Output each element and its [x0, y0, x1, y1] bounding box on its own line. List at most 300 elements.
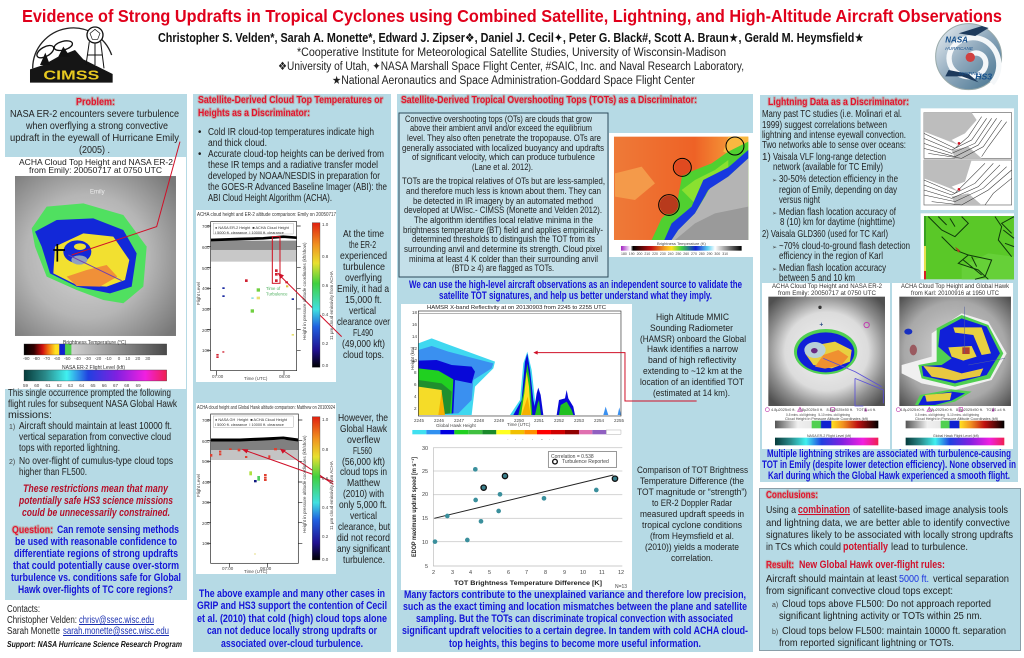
chart: Emily altitude comparison: ● NASA ER-2 Height ■ ACHA Cloud Height: [215, 226, 290, 230]
text block: problem statement: when overflying a strong convective: [25, 121, 168, 132]
text block: bullets: these IR temps and a radiative transfer model: [208, 160, 378, 171]
chart: HAMSR reflectivity: 2254: [594, 418, 605, 423]
text block: flight rules: Aircraft should maintain at least 10000 ft.: [19, 421, 172, 432]
chart: Matthew altitude comparison: 300: [202, 500, 210, 505]
callout: question: [11, 524, 181, 596]
text block: lightning networks: network (available for TC Emily): [773, 162, 883, 173]
text block: Global Hawk over Matthew: only 5,000 ft.: [339, 500, 387, 511]
text block: TOT definition box: of significant velocity, which can produce turbulence: [412, 152, 595, 162]
chart: Emily altitude comparison: Flight Level: [196, 282, 201, 305]
chart: HAMSR reflectivity: 16: [412, 322, 418, 327]
figure: Emily storm with lightning: from Emily: 20050717 at 0750 UTC: [778, 291, 877, 297]
chart: updraft speed scatter: 7: [525, 570, 528, 576]
text block: TOT definition box: The algorithm identifies local relative minima in the: [414, 215, 593, 225]
text block: Global Hawk over Matthew: FL560: [353, 446, 372, 457]
chart: updraft speed scatter: 2: [432, 570, 435, 576]
figure: Emily storm with lightning: [762, 283, 890, 449]
text block: TOT correlation description: Temperature Difference (the: [640, 476, 744, 486]
callout: panel conclusion: The above example and many other cases in: [199, 588, 385, 600]
chart: HAMSR reflectivity: 8: [414, 370, 417, 375]
text block: TOT definition box: (BTD ≥ 4) are flagged as TOTs.: [452, 263, 554, 273]
chart: Emily altitude comparison: Time (UTC): [244, 376, 268, 381]
figure: ACHA cloud top height Emily: from Emily: 20050717 at 0750 UTC: [29, 166, 162, 175]
text block: lightning networks: ➢: [772, 245, 777, 251]
text block: contacts: Contacts:: [7, 604, 40, 615]
icon: NASA HS3 logo: HURRICANE: [945, 46, 974, 51]
callout: restrictions warning: potentially safe HS3 science missions: [18, 495, 173, 507]
panel: problem: [5, 94, 187, 600]
text block: bullets: •: [198, 149, 202, 160]
figure: lightning detection efficiency map: [921, 213, 1014, 279]
text block: lightning networks: 8 (10) km for daytime (nighttime): [780, 217, 895, 228]
text block: TOT correlation description: correlation.: [671, 553, 713, 563]
figure: ACHA cloud top height Emily: NASA ER-2 Flight Level (kft): [62, 365, 125, 371]
text block: TOT definition box: level. They also often penetrate the tropopause. OTs are: [407, 133, 601, 143]
heading: problem: Problem:: [76, 96, 115, 108]
text block: ER-2 turbulence description: [337, 229, 390, 361]
text block: HAMSR description: High Altitude MMIC: [656, 312, 729, 322]
chart: Emily altitude comparison: ACHA cloud height and ER-2 altitude comparison: Emily on 20050717: [197, 212, 336, 218]
text block: TOT definition box: determined thresholds to distinguish the TOT from its: [412, 234, 595, 244]
chart: Emily altitude comparison: I 5000 ft. clearance I 10000 ft. clearance: [215, 231, 284, 235]
text block: ER-2 turbulence description: (49,000 kft): [342, 339, 385, 350]
text block: TOT definition box: TOTs are the tropical relatives of OTs but are less-sampled,: [402, 176, 605, 186]
text block: bullets: •: [198, 127, 202, 138]
text block: TOT correlation description: (from Heymsfield et al.: [650, 531, 734, 541]
panel: overshooting tops: [397, 94, 753, 652]
text block: lightning networks: versus night: [779, 195, 820, 206]
heading: result: New Global Hawk over-flight rules:: [799, 559, 945, 571]
chart: updraft speed scatter: 4: [469, 570, 472, 576]
chart: Emily altitude comparison: Turbulence: [266, 292, 288, 297]
chart: Matthew altitude comparison: 08:00: [260, 566, 272, 571]
text block: TOT definition box: (Lane et al. 2012).: [472, 162, 533, 172]
chart: Emily altitude comparison: 0.0: [322, 363, 329, 368]
chart: HAMSR reflectivity: Global Hawk Height: [436, 423, 477, 428]
text block: new flight rules: Aircraft should maintain at least: [766, 574, 897, 585]
text block: new flight rules: 5000 ft.: [899, 574, 929, 585]
text block: bullets: Cold IR cloud-top temperatures indicate high: [208, 127, 374, 138]
text block: TOT correlation description: Comparison of TOT Brightness: [637, 465, 748, 475]
text block: TOT definition box: generally associated with localized buoyancy and updrafts: [402, 143, 604, 153]
figure: TOT satellite map: [609, 133, 753, 257]
text block: ER-2 turbulence description: cloud tops.: [343, 350, 384, 361]
text block: contacts: [7, 604, 182, 649]
text block: ER-2 turbulence description: Emily, it had a: [337, 284, 389, 295]
text block: TOT correlation description: [637, 465, 748, 563]
authors and affiliations: ★National Aeronautics and Space Administration-Goddard Space Flight Center: [332, 75, 695, 87]
text block: ER-2 turbulence description: overflying: [345, 273, 382, 284]
chart: Emily altitude comparison: Height in pressure altitude coordinates (kft/show): [302, 242, 307, 340]
chart: updraft speed scatter: 3: [451, 570, 454, 576]
chart: Matthew altitude comparison: 200: [202, 521, 210, 526]
chart: HAMSR reflectivity: 6: [414, 382, 417, 387]
text block: conclusions: potentially: [843, 541, 888, 553]
figure: TOT satellite map: Brightness Temperature (K): [657, 241, 707, 246]
chart: Matthew altitude comparison: 0.2: [322, 534, 329, 539]
text block: lightning networks: between 5 and 10 km: [779, 273, 855, 284]
heading: cloud top temperatures: Heights as a Discriminator:: [198, 107, 310, 119]
callout: restrictions warning: [18, 483, 173, 519]
chart: Matthew altitude comparison: 700: [202, 418, 210, 423]
text block: contacts: Sarah Monette: [7, 626, 60, 637]
chart: HAMSR reflectivity: HAMSR Derived X-band Reflectivity: [481, 439, 558, 445]
text block: HAMSR description: Hawk identifies a narrow: [647, 344, 738, 354]
text block: contacts: Support: NASA Hurricane Science Research Program: [7, 639, 182, 649]
chart: Emily altitude comparison: 0.4: [322, 312, 329, 317]
text block: TOT correlation description: (2010)) yields a moderate: [645, 542, 739, 552]
text block: conclusions: lead to turbulence.: [891, 542, 968, 553]
chart: HAMSR reflectivity: Height (km): [410, 346, 415, 370]
callout: limitations: such as the exact timing and location mismatches between the plane and satellite: [403, 601, 747, 613]
text block: bullets: Accurate cloud-top heights can be derived from: [208, 149, 384, 160]
text block: Global Hawk over Matthew: (2010) with: [343, 489, 384, 500]
text block: Global Hawk over Matthew: Global Hawk: [340, 424, 388, 435]
chart: HAMSR reflectivity: 18: [412, 310, 418, 315]
text block: flight rules: missions:: [8, 410, 52, 421]
chart: Emily altitude comparison: 11 μm cloud emissivity from ACHA: [329, 271, 334, 340]
text block: ER-2 turbulence description: FL490: [353, 328, 373, 339]
text block: HAMSR description: (HAMSR) onboard the Global: [640, 334, 746, 344]
chart: Emily altitude comparison: 0.8: [322, 254, 329, 259]
text block: conclusions: [766, 504, 1013, 553]
figure: Karl storm with lightning: ACHA Cloud Top Height and Global Hawk: [901, 284, 1010, 290]
icon: NASA HS3 logo: HS3: [975, 71, 992, 81]
chart: Matthew altitude comparison: 100: [202, 541, 210, 546]
callout: question: Can remote sensing methods: [57, 524, 179, 536]
text block: TOT correlation description: TOT magnitude or “strength”): [637, 487, 747, 497]
text block: ER-2 turbulence description: experienced: [340, 251, 387, 262]
text block: HAMSR description: [640, 312, 746, 398]
chart: updraft speed scatter: 10: [422, 540, 428, 546]
icon: CIMSS logo: CIMSS: [43, 67, 99, 82]
text block: Global Hawk over Matthew: clearance, but: [338, 522, 390, 533]
authors and affiliations: [158, 31, 864, 87]
chart: Matthew altitude comparison: Height in pressure altitude coordinates (kft/show): [302, 435, 307, 533]
panel: lightning data: [760, 95, 1018, 482]
text block: TOT definition box: developed at UWisc.- CIMSS (Monette and Velden 2012).: [404, 205, 602, 215]
text block: HAMSR description: (estimated at 14 km).: [653, 388, 730, 398]
chart: Matthew altitude comparison: 11 μm cloud emissivity from ACHA: [329, 461, 334, 530]
heading: result: Result:: [766, 559, 794, 571]
chart: HAMSR reflectivity: 2253: [574, 418, 585, 423]
text block: bullets: [198, 127, 387, 204]
text block: lightning networks: region of Emily, depending on day: [779, 185, 897, 196]
text block: problem statement: (2005) .: [79, 145, 110, 156]
chart: updraft speed scatter: TOT Brightness Temperature Difference [K]: [454, 580, 602, 587]
callout: limitations: top heights, this begins to become more useful information.: [449, 638, 701, 650]
callout: limitations: sampling. But the TOTs can discriminate tropical convection with associated: [416, 613, 733, 625]
chart: updraft speed scatter: 15: [422, 516, 428, 522]
text block: Global Hawk over Matthew: (56,000 kft): [342, 457, 385, 468]
text block: contacts: sarah.monette@ssec.wisc.edu: [63, 626, 169, 637]
text block: Global Hawk over Matthew: overflew: [347, 435, 380, 446]
chart: updraft speed scatter: N=13: [615, 584, 627, 590]
chart: Matthew altitude comparison: [196, 403, 336, 574]
text block: flight rules: flight rules for subsequent NASA Global Hawk: [8, 399, 178, 410]
icon: NASA HS3 logo: SENTINEL: [959, 71, 982, 76]
chart: HAMSR reflectivity: HAMSR X-band Reflectivity at on 20130903 from 2245 to 2255 UTC: [427, 305, 606, 311]
text block: new flight rules: from reported significant lightning or TOTs.: [779, 638, 954, 649]
heading: lightning: Lightning Data as a Discriminator:: [768, 96, 909, 108]
text block: bullets: ABI Cloud Height Algorithm (ACHA).: [208, 193, 332, 204]
text block: ER-2 turbulence description: At the time: [343, 229, 384, 240]
chart: Emily altitude comparison: 08:00: [279, 374, 291, 379]
text block: bullets: developed by NOAA/NESDIS in preparation for: [208, 171, 381, 182]
text block: TOT definition box: brightness temperature (BT) field and applies empirically-: [403, 225, 603, 235]
figure: ACHA cloud top height Emily: Brightness Temperature (°C): [63, 340, 127, 346]
text block: conclusions: of satellite-based image analysis tools: [853, 505, 1008, 516]
text block: lightning networks: Median flash location accuracy of: [779, 207, 896, 218]
icon: CIMSS logo: [30, 27, 113, 83]
chart: Emily altitude comparison: [196, 210, 342, 382]
figure: Emily storm with lightning: ACHA Cloud Top Height and NASA ER-2: [772, 284, 883, 290]
text block: lightning networks: lightning and intense eyewall convection.: [762, 130, 906, 141]
text block: problem statement: updraft in the eyewall of Hurricane Emily: [10, 133, 180, 144]
figure: ACHA cloud top height Emily: Emily: [90, 189, 105, 195]
chart: Emily altitude comparison: 07:00: [212, 374, 224, 379]
callout: panel conclusion: GRIP and HS3 support the contention of Cecil: [197, 600, 387, 612]
callout: question: Hawk over-flights of TC core regions?: [18, 584, 173, 596]
text block: lightning networks: Vaisala VLF long-range detection: [773, 152, 886, 163]
chart: updraft speed scatter: 9: [563, 570, 566, 576]
chart: Matthew altitude comparison: 400: [202, 480, 210, 485]
chart: Matthew altitude comparison: 500: [202, 459, 210, 464]
chart: updraft speed scatter: Turbulence Reported: [562, 459, 609, 465]
callout: lightning finding: [760, 448, 1018, 482]
chart: updraft speed scatter: 11: [599, 570, 605, 576]
chart: HAMSR reflectivity: 2249: [494, 418, 505, 423]
text block: TOT definition box: minima at least 4 K colder than their surrounding anvil: [409, 254, 598, 264]
figure: ACHA cloud top height Emily: ACHA Cloud Top Height and NASA ER-2: [19, 158, 174, 167]
callout: limitations: [402, 589, 748, 650]
chart: HAMSR reflectivity: 12: [412, 346, 418, 351]
icon: NASA HS3 logo: NASA: [945, 36, 968, 45]
chart: Matthew altitude comparison: 0.0: [322, 557, 329, 562]
text block: flight rules: 1): [9, 424, 15, 431]
callout: panel conclusion: associated over-cloud turbulence.: [221, 638, 363, 650]
figure: ACHA cloud top height Emily: [5, 142, 186, 389]
chart: HAMSR reflectivity: 2251: [534, 418, 545, 423]
text block: bullets: the GOES-R Advanced Baseline Imager (ABI): the: [208, 182, 387, 193]
callout: validation sentence: [409, 279, 742, 302]
chart: HAMSR reflectivity: 14: [412, 334, 418, 339]
chart: HAMSR reflectivity: 2245: [414, 418, 425, 423]
text block: problem statement: NASA ER-2 encounters severe turbulence: [10, 109, 179, 120]
callout: question: differentiate regions of strong updrafts: [14, 548, 178, 560]
text block: ER-2 turbulence description: turbulence: [343, 262, 385, 273]
text block: new flight rules: vertical separation: [933, 574, 1009, 585]
text block: flight rules: tops with reported lightning.: [19, 443, 120, 454]
heading: overshooting tops: Satellite-Derived Tropical Overshooting Tops (TOTs) as a Discriminator:: [401, 94, 697, 106]
text block: Global Hawk over Matthew: vertical: [350, 511, 377, 522]
chart: Emily altitude comparison: 500: [202, 266, 210, 271]
figure: Karl storm with lightning: [892, 283, 1013, 449]
chart: Emily altitude comparison: 600: [202, 245, 210, 250]
callout: question: that could potentially cause over-storm: [13, 560, 179, 572]
chart: Emily altitude comparison: 0.2: [322, 341, 329, 346]
heading: conclusions: Conclusions:: [766, 489, 818, 501]
chart: Matthew altitude comparison: 0.4: [322, 505, 329, 510]
chart: HAMSR reflectivity: [401, 304, 697, 445]
text block: TOT definition box: [399, 113, 608, 277]
callout: question: turbulence vs. conditions safe for Global: [11, 572, 181, 584]
text block: flight rules: This single occurrence prompted the following: [8, 388, 171, 399]
text block: new flight rules: b): [772, 629, 778, 636]
text block: Global Hawk over Matthew: turbulence.: [343, 555, 385, 566]
text block: lightning networks: ➢: [772, 178, 777, 184]
text block: HAMSR description: location of an identified TOT: [640, 377, 744, 387]
chart: Matthew altitude comparison: I 5000 ft. clearance I 10000 ft. clearance: [215, 423, 284, 427]
callout: validation sentence: We can use the high-level aircraft observations as an independent source to validate the: [409, 279, 742, 291]
text block: Global Hawk over Matthew: However, the: [338, 413, 388, 424]
text block: new flight rules: a): [772, 602, 778, 609]
chart: updraft speed scatter: 5: [425, 564, 428, 570]
chart: updraft speed scatter: [401, 440, 632, 590]
panel: cloud top temperatures: [193, 94, 391, 652]
text block: conclusions: combination: [798, 504, 850, 516]
text block: TOT definition box: Convective overshooting tops (OTs) are clouds that grow: [405, 114, 592, 124]
chart: Emily altitude comparison: 1.0: [322, 222, 329, 227]
chart: Matthew altitude comparison: 0.8: [322, 447, 329, 452]
text block: flight rules: higher than FL500.: [19, 467, 87, 478]
callout: validation sentence: satellite TOT signatures, and help us better understand what they imply.: [439, 290, 712, 302]
text block: TOT correlation description: to ER-2 Doppler Radar: [652, 498, 732, 508]
chart: HAMSR reflectivity: 4: [414, 394, 417, 399]
text block: Global Hawk over Matthew: [337, 413, 390, 566]
text block: contacts: Christopher Velden:: [7, 615, 77, 626]
authors and affiliations: Christopher S. Velden*, Sarah A. Monette*, Edward J. Zipser❖, Daniel J. Cecil✦, Peter G. Black#, Scott A. Braun★, Gerald M. Heymsfield★: [158, 31, 864, 45]
callout: question: be used with reasonable confidence to: [15, 536, 177, 548]
text block: Global Hawk over Matthew: Matthew: [347, 478, 380, 489]
chart: HAMSR reflectivity: 2250: [514, 418, 525, 423]
text block: HAMSR description: band of high reflectivity: [648, 355, 736, 365]
text block: new flight rules: Cloud tops above FL500: Do not approach reported: [782, 599, 991, 610]
chart: updraft speed scatter: 25: [422, 469, 428, 475]
text block: ER-2 turbulence description: the ER-2: [349, 240, 376, 251]
text block: new flight rules: [766, 574, 1009, 649]
text block: lightning networks: 1999) suggest correlations between: [762, 120, 887, 131]
chart: updraft speed scatter: 30: [422, 446, 428, 452]
figure: steering contour maps: [921, 108, 1014, 210]
chart: updraft speed scatter: 8: [544, 570, 547, 576]
chart: HAMSR reflectivity: 2248: [474, 418, 485, 423]
text block: lightning networks: ➢: [772, 211, 777, 217]
callout: limitations: significant updraft velocities to a certain degree. In tandem with cold ACHA cloud-: [402, 625, 748, 637]
text block: TOT definition box: above their ambient anvil and/or exceed the equilibrium: [410, 123, 592, 133]
text block: ER-2 turbulence description: 15,000 ft.: [345, 295, 382, 306]
figure: ACHA cloud top height Emily: -90 -80 -70 -60 -50 -40 -30 -20 -10 0 10 20 30: [23, 356, 151, 361]
text block: Global Hawk over Matthew: any significant: [337, 544, 390, 555]
text block: ER-2 turbulence description: clearance over: [337, 317, 390, 328]
text block: Global Hawk over Matthew: did not record: [337, 533, 390, 544]
text block: TOT correlation description: measured updraft speeds in: [640, 509, 744, 519]
chart: Emily altitude comparison: 700: [202, 224, 210, 229]
chart: HAMSR reflectivity: 2252: [554, 418, 565, 423]
chart: updraft speed scatter: 12: [618, 570, 624, 576]
text block: lightning networks: [762, 109, 910, 284]
figure: Emily storm with lightning: NASA ER-2 Flight Level (kft): [807, 434, 851, 438]
heading: cloud top temperatures: Satellite-Derived Cloud Top Temperatures or: [198, 94, 383, 106]
text block: flight rules: vertical separation from convective cloud: [19, 432, 171, 443]
text block: flight rules: 2): [9, 459, 15, 466]
text block: ER-2 turbulence description: vertical: [349, 306, 376, 317]
figure: Emily storm with lightning: 0-5 mins. old lightning 5-10 mins. old lightning: [786, 413, 850, 417]
text block: lightning networks: Two networks able to sense over oceans:: [762, 140, 906, 151]
text block: HAMSR description: Sounding Radiometer: [650, 323, 733, 333]
chart: HAMSR reflectivity: 2: [414, 406, 417, 411]
text block: lightning networks: 30-50% detection efficiency in the: [779, 174, 898, 185]
text block: conclusions: Using a: [766, 505, 796, 516]
figure: Karl storm with lightning: 0-5 mins. old lightning 5-10 mins. old lightning: [915, 413, 979, 417]
text block: TOT correlation description: tropical cyclone conditions: [642, 520, 742, 530]
chart: Matthew altitude comparison: ACHA cloud height and Global Hawk altitude comparison: Matthew on 20100924: [197, 405, 335, 411]
chart: Emily altitude comparison: 0.6: [322, 283, 329, 288]
chart: Emily altitude comparison: 200: [202, 328, 210, 333]
chart: updraft speed scatter: EDOP maximum updraft speed [m s⁻¹]: [411, 457, 418, 557]
panel: conclusions: [760, 488, 1020, 650]
chart: Matthew altitude comparison: ● NASA GH Height ■ ACHA Cloud Height: [215, 418, 288, 422]
text block: lightning networks: 1): [762, 152, 771, 163]
chart: updraft speed scatter: 5: [488, 570, 491, 576]
text block: lightning networks: ~70% cloud-to-ground flash detection: [779, 241, 910, 252]
chart: HAMSR reflectivity: 2246: [434, 418, 445, 423]
text block: TOT definition box: surrounding anvil and determine its strength. Cloud pixel: [404, 244, 602, 254]
callout: limitations: Many factors contribute to the unexplained variance and therefore low precision,: [404, 589, 746, 601]
text block: bullets: and thick cloud.: [208, 138, 267, 149]
text block: lightning networks: 2) Vaisala GLD360 (used for TC Karl): [762, 229, 888, 240]
text block: HAMSR description: extending to ~12 km at the: [643, 366, 742, 376]
chart: HAMSR reflectivity: 10: [412, 358, 418, 363]
callout: panel conclusion: et al. (2010) that cold (high) cloud tops alone: [197, 613, 387, 625]
chart: updraft speed scatter: Correlation = 0.538: [551, 454, 594, 460]
figure: Karl storm with lightning: 4.8μ2025±0 ft. 4.8μ2025±0 ft. 8.8μ2025±50 ft. TOTS ≥4 ft.: [900, 408, 1006, 412]
icon: NASA HS3 logo: [936, 24, 1002, 90]
chart: Emily altitude comparison: Time of: [266, 286, 281, 291]
chart: Emily altitude comparison: 400: [202, 286, 210, 291]
figure: Emily storm with lightning: Cloud Height in Pressure Altitude Coordinates (kft): [785, 417, 868, 421]
authors and affiliations: ❖University of Utah, ✦NASA Marshall Space Flight Center, #SAIC, Inc. and Naval Research Laboratory,: [278, 61, 744, 73]
callout: panel conclusion: can not deduce locally strong updrafts or: [207, 625, 377, 637]
text block: lightning networks: ➢: [772, 267, 777, 273]
text block: flight rules: [8, 388, 178, 478]
text block: lightning networks: Median flash location accuracy: [779, 263, 886, 274]
text block: flight rules: No over-flight of cumulus-type cloud tops: [19, 456, 173, 467]
callout: restrictions warning: could be unnecessarily constrained.: [22, 507, 170, 519]
callout: panel conclusion: [197, 588, 387, 650]
chart: Matthew altitude comparison: 1.0: [322, 417, 329, 422]
chart: Matthew altitude comparison: Flight Level: [196, 474, 201, 497]
text block: lightning networks: Many past TC studies (i.e. Molinari et al.: [762, 109, 902, 120]
text block: TOT definition box: and therefore much less is known about them. They can: [406, 186, 601, 196]
chart: Matthew altitude comparison: 600: [202, 439, 210, 444]
figure: Karl storm with lightning: Cloud Height in Pressure Altitude Coordinates (kft): [915, 417, 998, 421]
figure: Emily storm with lightning: 4.8μ2025±0 ft. 4.8μ2025±0 ft. 8.8μ2025±50 ft. TOTS ≥4 ft.: [771, 408, 876, 412]
callout: question: Question:: [12, 524, 53, 536]
chart: Matthew altitude comparison: Time (UTC): [244, 569, 268, 574]
chart: Matthew altitude comparison: 07:00: [222, 566, 234, 571]
figure: Karl storm with lightning: from Karl: 20100916 at 1950 UTC: [911, 291, 1000, 297]
text block: lightning networks: efficiency in the region of Karl: [779, 251, 883, 262]
figure: Karl storm with lightning: Global Hawk Flight Level (kft): [933, 434, 979, 438]
chart: updraft speed scatter: 10: [580, 570, 586, 576]
text block: Global Hawk over Matthew: cloud tops in: [340, 467, 387, 478]
chart: HAMSR reflectivity: 2255: [614, 418, 625, 423]
chart: Emily altitude comparison: 100: [202, 348, 210, 353]
text block: conclusions: in TCs which could: [766, 542, 841, 553]
chart: Emily altitude comparison: 300: [202, 307, 210, 312]
text block: problem statement: [10, 109, 180, 156]
